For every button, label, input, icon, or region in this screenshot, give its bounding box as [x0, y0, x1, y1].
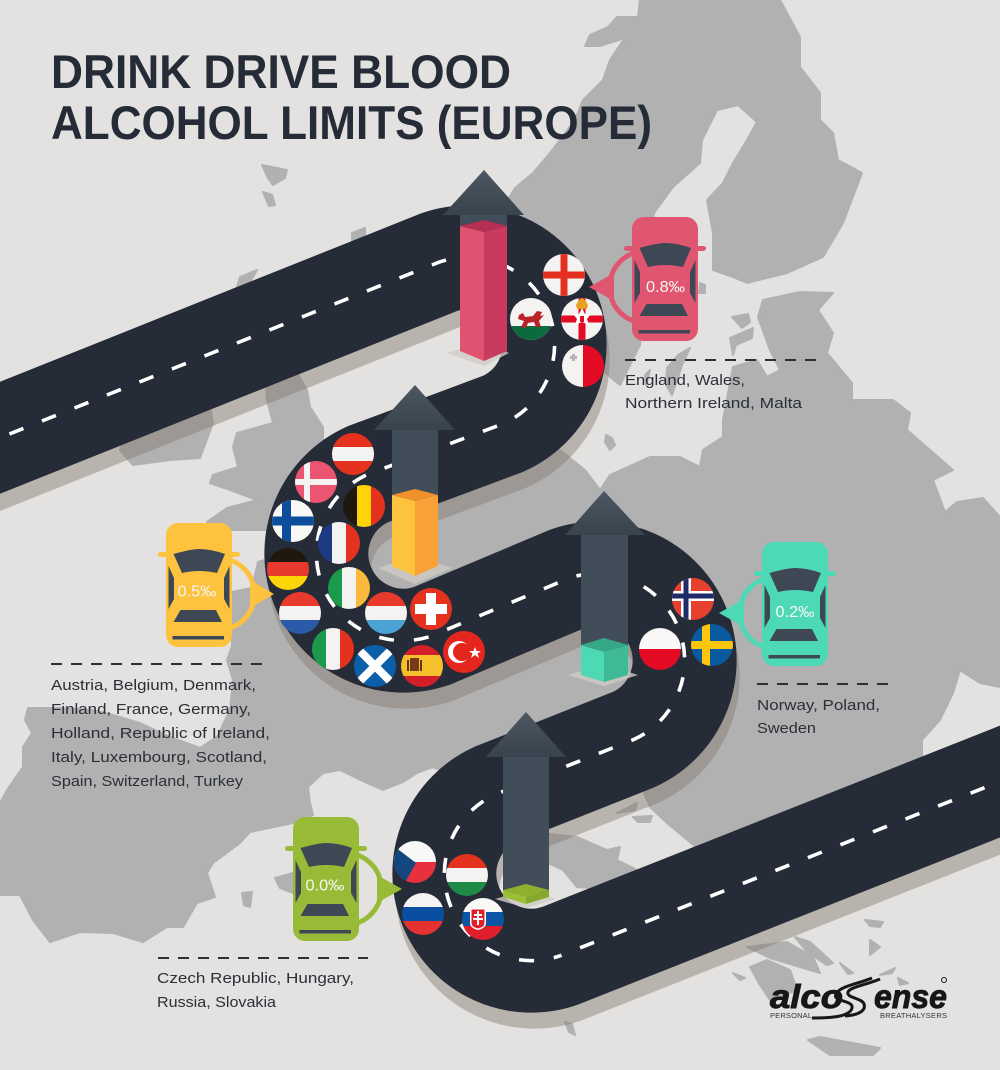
land: Scandinavia and Finland: [470, 0, 862, 385]
flag: Slovakia: [462, 898, 504, 940]
flag: Turkey: [443, 631, 485, 673]
flag: Northern Ireland: [561, 298, 603, 340]
country list: 0.0: Russia, Slovakia: [157, 994, 277, 1011]
country list: 0.8: Northern Ireland, Malta: [625, 395, 803, 412]
winding road: [0, 257, 1000, 961]
country list: 0.5: [51, 664, 270, 790]
title: DRINK DRIVE BLOOD: [51, 45, 511, 98]
flag: Scotland: [354, 645, 396, 687]
arrow and bar: 0.8 limit: [443, 170, 524, 366]
flag: Austria: [332, 433, 374, 475]
road shadow: [0, 273, 1000, 977]
flag: Ireland: [328, 567, 370, 609]
flag: Poland: [639, 628, 681, 670]
car: yellow 0.5: [158, 523, 274, 647]
land: Italy and Balkan strip: [530, 833, 637, 888]
flags: 0.2 per mille group: [639, 578, 733, 670]
road centre dashes: [0, 257, 1000, 961]
label: 0.0 per mille: 0.0‰: [306, 878, 345, 894]
flag: Switzerland: [410, 588, 452, 630]
country list: 0.2: Sweden: [757, 720, 816, 737]
flag: Czech Republic: [394, 841, 436, 883]
country list: 0.5: Finland, France, Germany,: [51, 701, 251, 718]
flag: Germany: [267, 548, 309, 590]
arrow and bar: 0.0 limit: [486, 712, 566, 908]
logo: AlcoSense: PERSONAL: [770, 1011, 812, 1020]
label: 0.5 per mille: 0.5‰: [178, 584, 217, 600]
country list: 0.5: Italy, Luxembourg, Scotland,: [51, 749, 267, 766]
flag: Denmark: [295, 461, 337, 503]
swoosh letter s: [812, 978, 880, 1018]
car: pink 0.8: [589, 217, 706, 341]
flag: Hungary: [446, 854, 488, 896]
flag: Holland: [279, 592, 321, 634]
land: Mediterranean and Baltic islands: [237, 165, 908, 1055]
country list: 0.2: Norway, Poland,: [757, 697, 880, 714]
car: green 0.0: [285, 817, 402, 941]
logo: AlcoSense: ense: [874, 978, 947, 1015]
logo: AlcoSense: alco: [770, 978, 843, 1015]
flag: Finland: [272, 500, 314, 542]
country list: 0.2: [757, 684, 888, 737]
flag: France: [318, 522, 360, 564]
land: Great Britain: [207, 360, 323, 530]
title: ALCOHOL LIMITS (EUROPE): [51, 96, 652, 149]
flag: Malta: [562, 345, 604, 387]
land: Ireland: [120, 380, 213, 465]
country list: 0.0: [157, 958, 368, 1011]
flags: 0.8 per mille group: [510, 254, 604, 387]
flag: Luxembourg: [365, 592, 407, 634]
flag: Wales: [510, 298, 552, 340]
flags: 0.5 per mille group: [267, 433, 485, 687]
flag: Belgium: [343, 485, 385, 527]
arrow and bar: 0.2 limit: [565, 491, 645, 686]
flag: Italy: [312, 628, 354, 670]
country list: 0.5: Spain, Switzerland, Turkey: [51, 773, 244, 790]
flag: Russia: [402, 893, 444, 935]
country list: 0.8: England, Wales,: [625, 372, 745, 389]
country list: 0.5: Austria, Belgium, Denmark,: [51, 677, 256, 694]
country list: 0.8: [625, 360, 817, 412]
country list: 0.5: Holland, Republic of Ireland,: [51, 725, 270, 742]
logo: AlcoSense: [770, 978, 947, 1020]
flag: Sweden: [691, 624, 733, 666]
flag: England: [543, 254, 585, 296]
country list: 0.0: Czech Republic, Hungary,: [157, 970, 354, 987]
title: [51, 45, 652, 149]
arrow and bar: 0.5 limit: [374, 385, 455, 584]
label: 0.2 per mille: 0.2‰: [776, 604, 815, 621]
car: teal 0.2: [719, 542, 836, 666]
flags: 0.0 per mille group: [391, 841, 504, 940]
flag: Norway: [672, 578, 714, 620]
land: continental Europe: [0, 292, 1000, 942]
label: 0.8 per mille: 0.8‰: [646, 279, 685, 296]
flag: Spain: [401, 645, 443, 687]
logo: AlcoSense: BREATHALYSERS: [880, 1011, 947, 1020]
